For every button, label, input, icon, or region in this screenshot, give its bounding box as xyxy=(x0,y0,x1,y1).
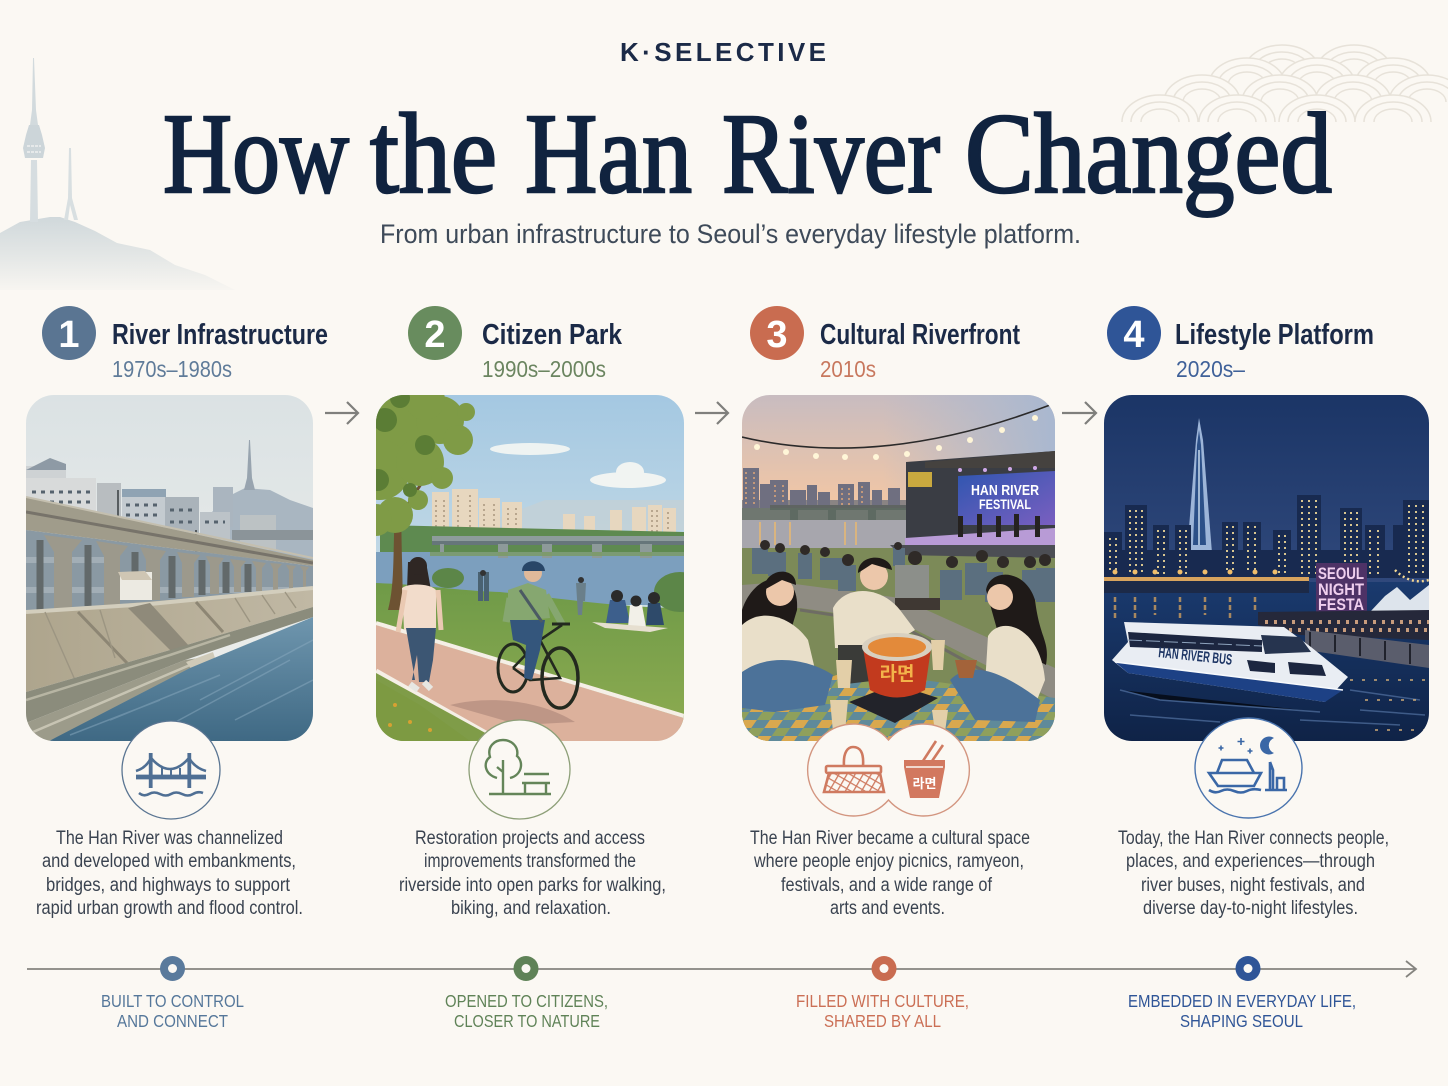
text: stage 1 description xyxy=(36,828,303,919)
text: stage 2 description: improvements transformed the xyxy=(424,851,636,872)
image: cultural riverfront festival: 라면 xyxy=(880,663,914,685)
image: concrete river infrastructure xyxy=(26,395,313,741)
image: night river bus and city: NIGHT xyxy=(1318,580,1365,599)
stage 3 header xyxy=(750,306,1020,382)
label: filled with culture: FILLED WITH CULTURE, xyxy=(796,991,969,1011)
timeline xyxy=(27,956,1416,981)
decorative wave pattern top right xyxy=(1122,45,1448,122)
stage 3 header: 2010s xyxy=(820,356,876,382)
image: cultural riverfront festival xyxy=(742,395,1055,741)
stage 4 header xyxy=(1107,306,1374,382)
stage 1 header: River Infrastructure xyxy=(112,319,328,351)
image: citizen park with cyclist xyxy=(376,395,684,741)
stage 2 header: 1990s–2000s xyxy=(482,356,606,382)
brand: K·SELECTIVE xyxy=(620,37,826,67)
text: stage 2 description xyxy=(399,828,666,919)
text: stage 1 description: rapid urban growth and flood control. xyxy=(36,898,303,919)
text: stage 2 description: biking, and relaxation. xyxy=(451,898,611,919)
title: Changed xyxy=(965,90,1332,217)
text: stage 3 description: where people enjoy picnics, ramyeon, xyxy=(753,851,1024,872)
arrow 3 to 4 xyxy=(1062,402,1096,424)
icon: picnic basket and ramyeon cup: 라면 xyxy=(913,776,936,791)
decorative Seoul tower and mountain silhouette xyxy=(0,58,235,296)
image: cultural riverfront festival: FESTIVAL xyxy=(979,496,1031,512)
text: stage 3 description: festivals, and a wide range of xyxy=(781,875,993,896)
arrow 1 to 2 xyxy=(325,402,358,424)
title: River xyxy=(722,90,940,217)
image: night river bus and city: SEOUL xyxy=(1318,564,1364,583)
text: stage 2 description: riverside into open parks for walking, xyxy=(399,875,666,896)
icon: boat and city at night xyxy=(1195,718,1302,818)
icon: picnic basket and ramyeon cup xyxy=(808,724,969,816)
stage 4 header: 4 xyxy=(1123,314,1145,356)
label: opened to citizens: CLOSER TO NATURE xyxy=(454,1011,600,1031)
stage 2 header xyxy=(408,306,623,382)
text: stage 3 description: The Han River became a cultural space xyxy=(750,828,1030,849)
label: opened to citizens: OPENED TO CITIZENS, xyxy=(445,991,608,1011)
stage 2 header: 2 xyxy=(424,314,446,356)
image: cultural riverfront festival: HAN RIVER xyxy=(971,482,1039,499)
icon: bridge xyxy=(122,721,220,819)
label: embedded in everyday life xyxy=(1128,991,1356,1031)
text: stage 4 description: river buses, night festivals, and xyxy=(1141,875,1365,896)
label: built to control: AND CONNECT xyxy=(117,1011,228,1031)
icon: tree and bench xyxy=(469,720,570,819)
text: stage 1 description: The Han River was channelized xyxy=(56,828,283,849)
text: stage 1 description: and developed with embankments, xyxy=(42,851,296,872)
stage 3 header: 3 xyxy=(766,314,788,356)
label: opened to citizens xyxy=(445,991,608,1031)
label: filled with culture: SHARED BY ALL xyxy=(824,1011,941,1031)
label: embedded in everyday life: EMBEDDED IN EVERYDAY LIFE, xyxy=(1128,991,1356,1011)
text: stage 4 description: Today, the Han River connects people, xyxy=(1118,828,1389,849)
image: night river bus and city: HAN RIVER BUS xyxy=(1158,644,1233,669)
label: embedded in everyday life: SHAPING SEOUL xyxy=(1180,1011,1303,1031)
title: the xyxy=(370,90,497,217)
label: built to control: BUILT TO CONTROL xyxy=(101,991,244,1011)
image: night river bus and city: FESTA xyxy=(1318,595,1364,614)
stage 1 header: 1 xyxy=(58,314,80,356)
title: How xyxy=(163,90,349,217)
stage 2 header: Citizen Park xyxy=(482,319,623,351)
stage 1 header xyxy=(42,306,328,382)
text: stage 4 description: diverse day-to-night lifestyles. xyxy=(1143,898,1358,919)
text: stage 2 description: Restoration projects and access xyxy=(415,828,645,849)
title xyxy=(163,90,1332,217)
text: stage 3 description: arts and events. xyxy=(830,898,945,919)
arrow 2 to 3 xyxy=(695,402,728,424)
label: built to control xyxy=(101,991,244,1031)
stage 3 header: Cultural Riverfront xyxy=(820,319,1020,351)
text: stage 4 description xyxy=(1118,828,1389,919)
stage 1 header: 1970s–1980s xyxy=(112,356,232,382)
image: night river bus and city xyxy=(1104,395,1429,741)
text: stage 3 description xyxy=(750,828,1030,919)
stage 4 header: Lifestyle Platform xyxy=(1175,319,1374,351)
text: stage 4 description: places, and experiences—through xyxy=(1126,851,1375,872)
label: filled with culture xyxy=(796,991,969,1031)
stage 4 header: 2020s– xyxy=(1176,356,1245,382)
title: Han xyxy=(525,90,692,217)
subtitle: From urban infrastructure to Seoul’s everyday lifestyle platform. xyxy=(380,219,1081,249)
text: stage 1 description: bridges, and highways to support xyxy=(46,875,291,896)
